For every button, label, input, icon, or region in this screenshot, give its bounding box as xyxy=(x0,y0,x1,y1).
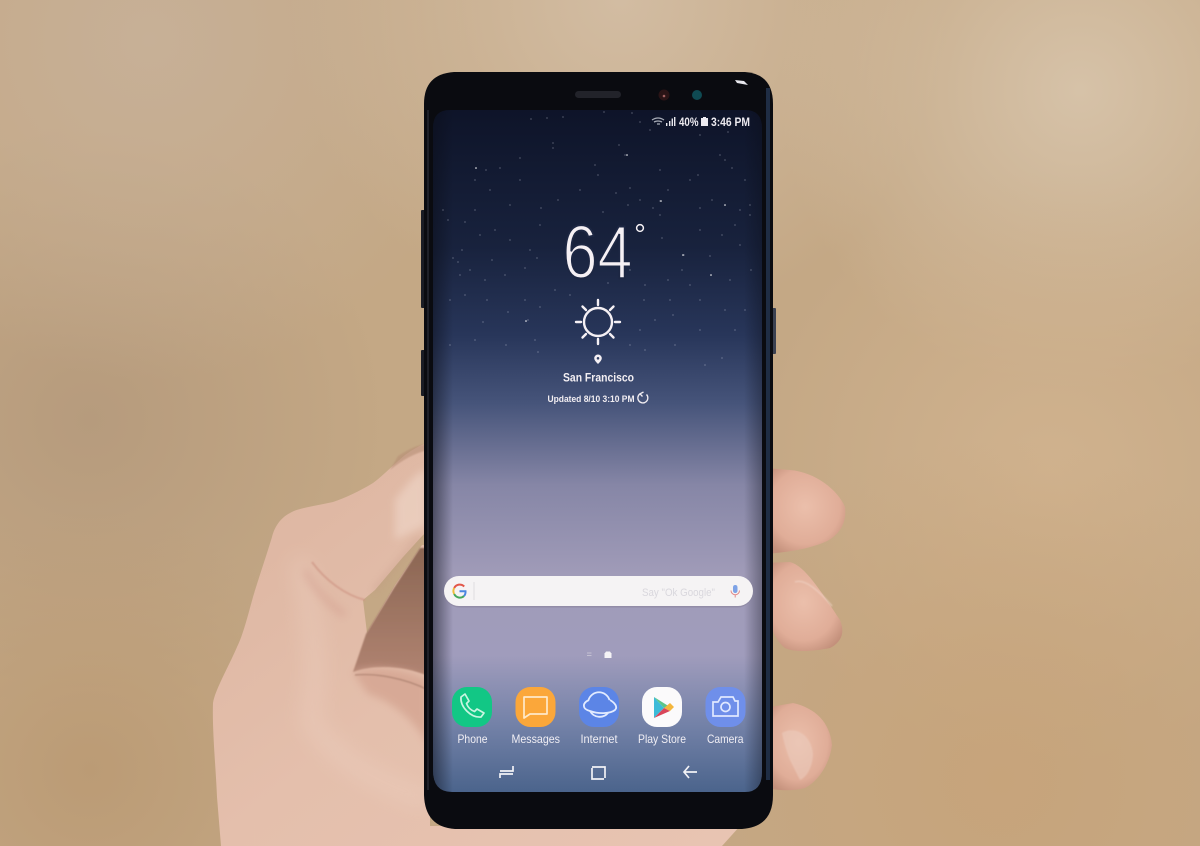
icon: location pin xyxy=(594,354,602,364)
thumbnail highlight xyxy=(395,470,426,540)
temperature: 64 xyxy=(562,210,633,294)
icon: microphone xyxy=(731,585,740,598)
phone frame xyxy=(424,72,773,829)
page indicators xyxy=(587,652,612,658)
finger 2 nail xyxy=(795,581,832,606)
curved glass left edge xyxy=(433,120,451,792)
side buttons xyxy=(421,210,425,308)
finger 1 xyxy=(765,468,845,554)
phone body xyxy=(421,72,776,829)
icon: Google G xyxy=(453,585,466,598)
phone screen xyxy=(433,110,762,792)
battery percent: 40% xyxy=(679,115,699,129)
icon: refresh xyxy=(638,392,648,403)
app dock xyxy=(452,687,746,746)
planet xyxy=(588,692,610,700)
earpiece xyxy=(575,91,621,98)
palm fold xyxy=(353,668,428,745)
search bar xyxy=(444,576,753,608)
app: Phone: Phone xyxy=(458,732,488,746)
icon: back xyxy=(684,766,697,778)
icon: sun xyxy=(576,300,620,344)
degree symbol xyxy=(637,225,643,231)
thumb knuckle crease xyxy=(312,562,365,600)
finger 3 nail xyxy=(782,730,813,780)
curved glass right edge xyxy=(746,158,762,792)
app: Play Store xyxy=(638,687,686,746)
app: Phone xyxy=(452,687,492,746)
palm shadow xyxy=(353,548,428,676)
highlight across back of hand xyxy=(300,560,428,800)
app: Camera xyxy=(706,687,746,746)
app: Messages xyxy=(512,687,560,746)
app: Messages: Messages xyxy=(512,732,560,746)
app: Play Store: Play Store xyxy=(638,732,686,746)
weather widget xyxy=(548,210,648,405)
front sensors xyxy=(658,90,702,100)
update time: Updated 8/10 3:10 PM xyxy=(548,394,635,405)
city name: San Francisco xyxy=(563,370,634,384)
hand: palm and thumb xyxy=(213,443,740,846)
icon: home xyxy=(592,767,605,779)
ring xyxy=(584,700,616,713)
app: Camera: Camera xyxy=(707,732,744,746)
finger 2 xyxy=(765,562,842,651)
top glare xyxy=(735,80,748,85)
app: Internet: Internet xyxy=(580,732,618,746)
voice hint: Say "Ok Google" xyxy=(642,587,715,599)
finger 3 xyxy=(765,703,832,790)
star field xyxy=(443,112,751,365)
icon: signal bars xyxy=(666,117,675,126)
app: Internet xyxy=(579,687,619,746)
icon: battery xyxy=(701,117,708,126)
fingers on right side xyxy=(765,468,845,790)
icon: wifi xyxy=(652,118,664,124)
navigation bar xyxy=(500,766,697,779)
icon: recents xyxy=(500,766,513,778)
status bar xyxy=(652,115,750,129)
clock: 3:46 PM xyxy=(711,115,750,129)
